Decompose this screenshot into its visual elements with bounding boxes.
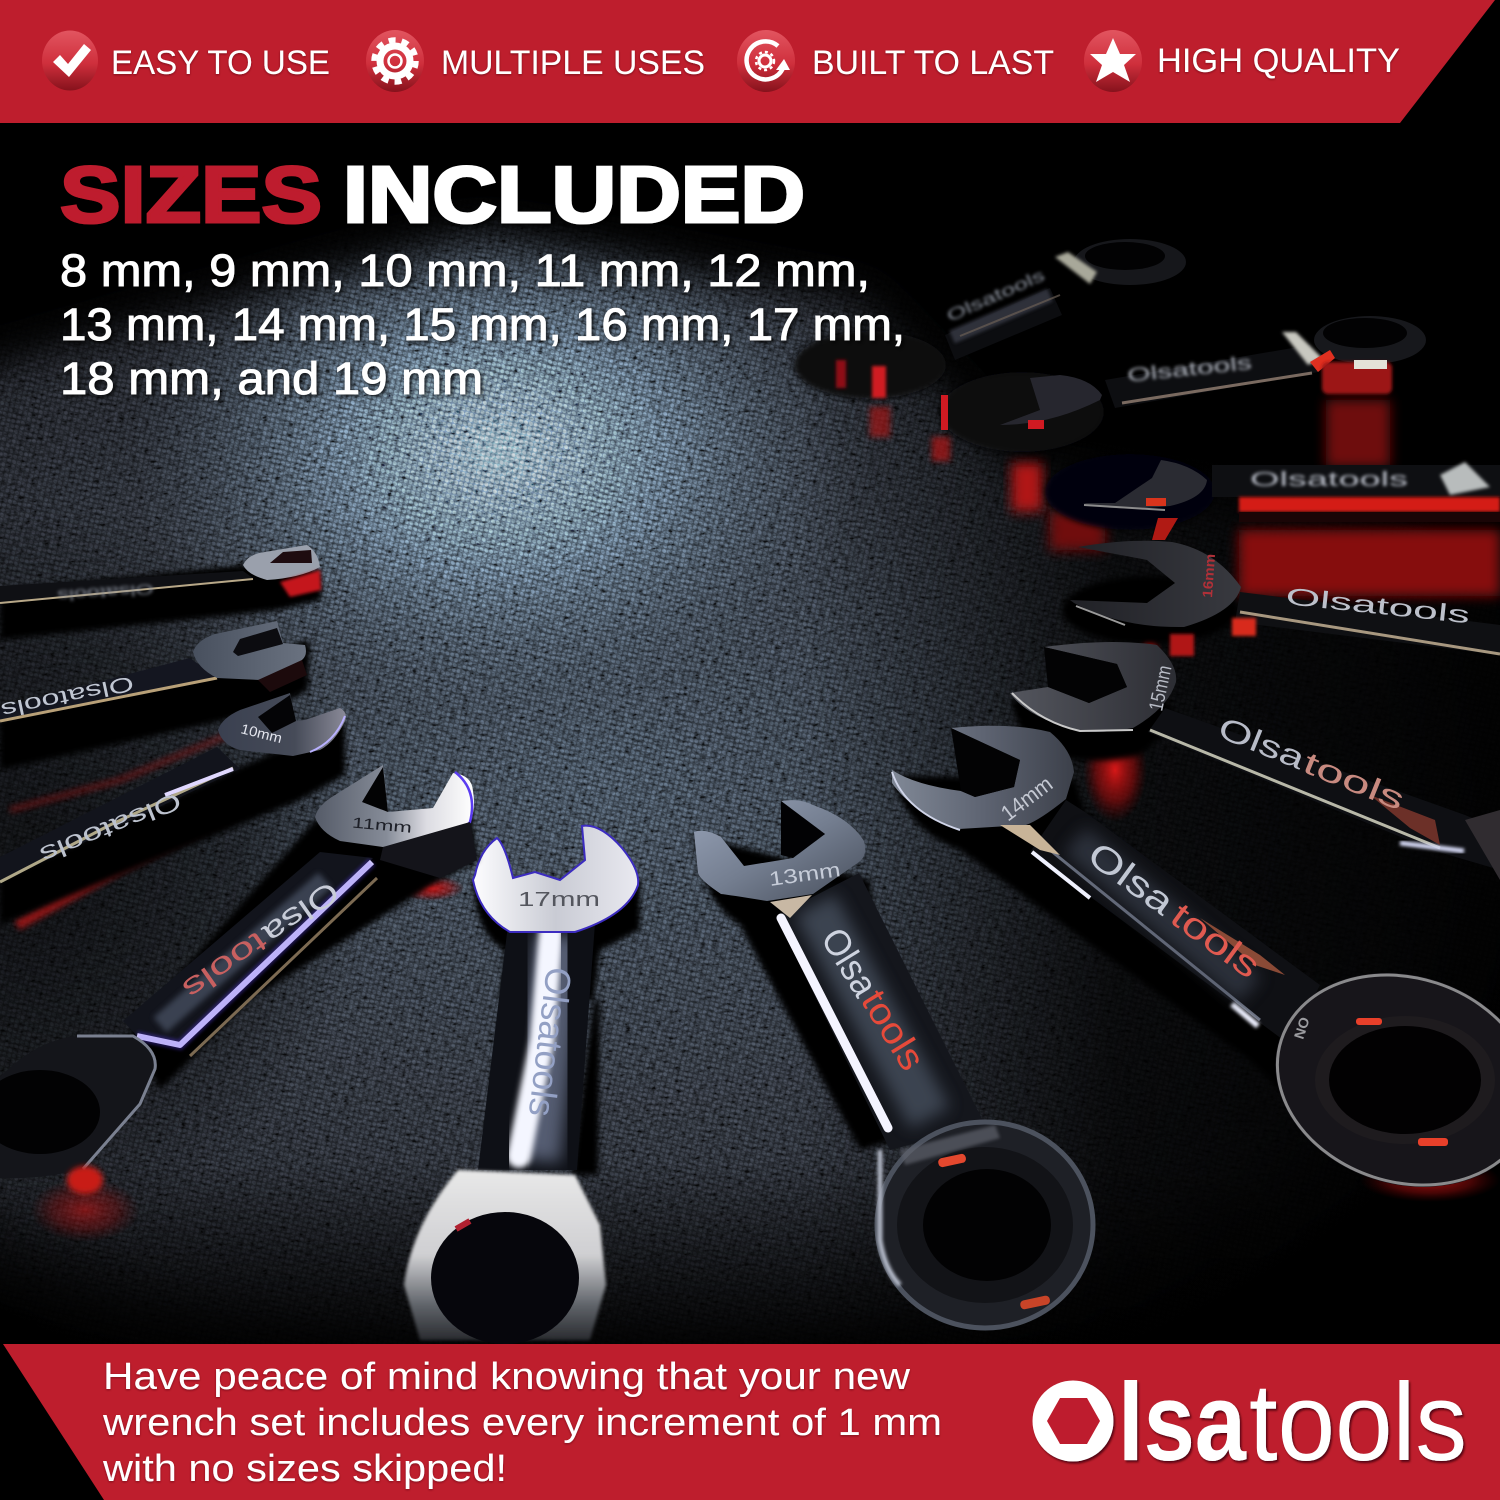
wrench: 17 mm: Olsatools [521,965,580,1119]
heading: sizes included [60,150,805,239]
size list: 8 mm, 9 mm, 10 mm, 11 mm, 12 mm, [60,245,870,296]
wrench: 12 mm, upper right: Olsatools [1126,353,1253,387]
wrench: 15 mm: tools [1298,745,1410,817]
wrench: 15 mm: Olsa [1213,710,1311,777]
wrench: 14 mm: 14mm [996,771,1057,826]
wrench: 11 mm [0,765,478,1194]
wrench: 17 mm: 17mm [518,889,600,911]
feature: built to last: BUILT TO LAST [812,44,1054,82]
wrench: 11 mm: Olsa [256,874,345,950]
size list [60,245,905,404]
feature: built to last [737,30,1054,92]
wrench: 15 mm: 15mm [1145,663,1176,713]
top banner [0,0,1495,123]
wrench: 13 mm [694,800,1095,1330]
wrench: 8 mm: Olsatools [57,580,154,604]
wrench: 14 mm: NO [1291,1015,1313,1041]
wrench: 13 mm: Olsa [813,921,886,1004]
wrench: 9 mm: Olsatools [0,671,136,722]
feature: high quality: HIGH QUALITY [1157,42,1400,80]
heading: sizes included: INCLUDED [343,150,805,239]
wrench: 10 mm: 10mm [239,720,284,746]
heading: sizes included: SIZES [60,150,322,239]
wrench: 16 mm: Olsatools [1284,583,1471,629]
wrench: 19 mm, top right [794,239,1186,399]
wrench: 13 mm: tools [853,983,933,1077]
wrench: 13 mm: 13mm [768,859,842,891]
wrench: 19 mm, top right: Olsatools [944,266,1048,326]
red light reflections on the mat [10,400,1500,1306]
wrench: 14 mm: Olsa [1080,833,1183,924]
wrench: 14 mm: tools [1163,894,1268,986]
logo: Olsatools [1032,1361,1467,1484]
wrench: 11 mm: 11mm [351,815,413,837]
wrench: 10 mm: Olsatools [36,786,185,868]
size list: 13 mm, 14 mm, 15 mm, 16 mm, 17 mm, [60,299,905,350]
wrench: 15 mm [1010,642,1500,880]
wrench: 12 mm, upper right [940,316,1426,452]
wrench: 14 mm [892,726,1500,1220]
bottom banner [3,1344,1500,1500]
banner background [0,0,1495,123]
banner background [3,1344,1500,1500]
statement text: with no sizes skipped! [102,1448,507,1490]
feature: multiple uses [366,30,705,92]
feature: easy to use [42,30,330,90]
wrench: 18 mm: Olsatools [1250,469,1408,491]
feature: easy to use: EASY TO USE [111,44,330,82]
size list: 18 mm, and 19 mm [60,353,483,404]
statement text: Have peace of mind knowing that your new [103,1356,911,1398]
wrench: 11 mm: tools [176,924,273,1006]
statement text: wrench set includes every increment of 1 mm [102,1402,942,1444]
wrench: 17 mm [404,826,640,1344]
logo: Olsatools: lsa [1118,1361,1247,1484]
wrench: 10 mm [0,693,346,925]
wrench: 18 mm [1045,454,1500,540]
logo: Olsatools: tools [1249,1361,1467,1484]
wrench: 8 mm [0,545,322,640]
feature: high quality [1084,30,1400,92]
statement text [102,1356,942,1490]
wrench: 16 mm [1062,541,1500,656]
feature: multiple uses: MULTIPLE USES [441,44,705,82]
wrench: 9 mm [0,621,310,770]
wrench: 16 mm: 16mm [1199,553,1218,598]
